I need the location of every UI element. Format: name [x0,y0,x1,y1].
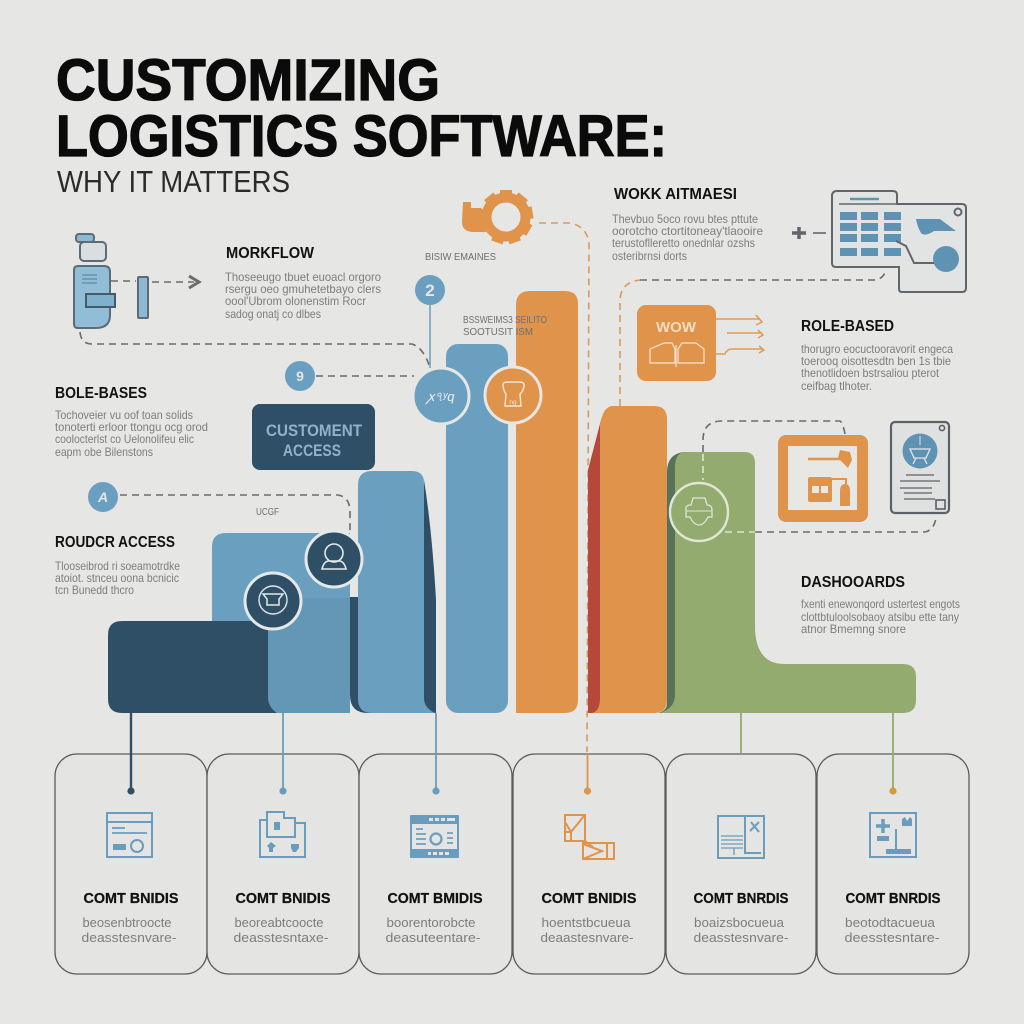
card 2: COMT BNIDIS [236,891,331,907]
text: role-based body [801,342,953,393]
card 1 [55,713,207,974]
card 3: boorentorobcte [386,916,476,930]
small label: bssweims: SOOTUSIT ISM [463,327,533,338]
text: role-based body: thorugro eocuctooravorit engeca [801,342,953,356]
small label: bisiw emaines: BISIW EMAINES [425,252,496,263]
title: CUSTOMIZING [56,48,440,113]
text: bole-bases body: Tochoveier vu oof toan solids [55,408,193,422]
card 5: deasstesnvare- [694,931,788,945]
stem 3 [432,713,440,795]
heading: bole-bases [55,385,208,459]
label box: customent access: CUSTOMENT [266,421,363,440]
text: role-based body: thenotlidoen bstrsaliou pterot [801,366,940,380]
heading: dashoards [801,574,960,636]
card 2: beoreabtcoocte [234,916,324,930]
icon circle: orange glyph [485,367,541,423]
card 6: deesstesntare- [844,931,940,945]
heading: rouder access: ROUDCR ACCESS [55,534,175,551]
badge: 2 [415,275,445,368]
text: rouder access body: tcn Bunedd thcro [55,583,134,597]
badge: 9 [285,361,315,391]
card 5: COMT BNRDIS [694,891,789,907]
title: LOGISTICS SOFTWARE: [56,104,667,169]
icon: card 4 check flow [565,815,614,859]
bar: blue step three [424,480,436,713]
text: rouder access body: atoiot. stnceu oona bcnicic [55,571,179,585]
heading: role-based: ROLE-BASED [801,318,894,335]
text: bole-bases body [55,408,208,459]
text: bole-bases body: coolocterlst co Uelonolifeu elic [55,432,194,446]
stem 5 [740,713,742,753]
icon: wow box [637,305,764,381]
bar: green dark side [658,452,690,713]
icon circle: user [306,531,362,587]
heading: morkflow: MORKFLOW [226,245,314,262]
card 2 [207,713,359,974]
heading: work aitmaesi [612,186,763,263]
bar: orange red side [588,420,606,713]
icon: card 5 panel [718,816,764,858]
stem 4 [584,754,591,795]
bar: blue step two [212,533,350,713]
text: rouder access body: Tlooseibrod ri soeamotrdke [55,559,180,573]
card 5: boaizsbocueua [694,916,784,930]
bar: green L shape [660,452,916,713]
text: role-based body: ceifbag tlhoter. [801,379,872,393]
text: dashoards body: clottbtuloolsobaoy atsibu ette tany [801,610,959,624]
text: morkflow body: sadog onatj co dlbes [225,307,321,321]
text: work aitmaesi body: oorotcho ctortitoneay'tlaooire [612,224,763,238]
card 1: beosenbtroocte [82,916,172,930]
badge: A: A [97,489,108,505]
text: work aitmaesi body: terustoflleretto onednlar ozshs [612,236,755,250]
badge: A [88,482,118,512]
bar: navy base [108,621,277,713]
icon: card 3 browser [410,815,459,858]
connector: gear to orange stem [539,223,589,752]
label box: customent access [252,404,375,470]
text: rouder access body [55,559,180,597]
text: work aitmaesi body [612,212,763,263]
icon circle: box [245,573,301,629]
connector: badge 4 [120,495,350,533]
icon circle: blue glyphs [413,368,469,424]
icon: gear with hand [462,190,534,244]
connector: wow to bar [620,280,640,406]
text: bole-bases body: eapm obe Bilenstons [55,445,153,459]
label box: customent access: ACCESS [283,441,341,460]
card 6: COMT BNRDIS [846,891,941,907]
text: morkflow body: Thoseeugo tbuet euoacl orgoro [225,270,381,284]
card 6: beotodtacueua [845,916,935,930]
card 5 [666,713,816,974]
connector: badge 9 [316,375,414,377]
text: work aitmaesi body: osteribrnsi dorts [612,249,687,263]
heading: dashoards: DASHOOARDS [801,574,905,591]
stem 2 [279,713,287,795]
text: dashoards body: atnor Bmemng snore [801,622,906,636]
icon: wow box: WOW [656,319,697,336]
connector: workflow to chart [80,332,430,368]
card 1: COMT BNIDIS [84,891,179,907]
bar: orange step six [592,406,667,713]
card 6 [817,713,969,974]
stem 6 [889,713,897,795]
icon: card 1 window [107,813,152,857]
icon: workflow device [74,234,199,328]
badge: 9: 9 [296,368,304,384]
text: bole-bases body: tonoterti erloor ttongu ocg orod [55,420,208,434]
small label: ucgf: UCGF [256,507,279,518]
text: work aitmaesi body: Thevbuo 5oco rovu btes pttute [612,212,758,226]
heading: role-based [801,318,953,393]
text: morkflow body [225,270,381,321]
bar: blue step four [446,344,508,713]
heading: rouder access [55,534,180,597]
card 3: deasuteentare- [386,931,480,945]
bar: navy shadow [350,597,372,713]
icon: orange tool frame [778,435,868,522]
small label: bssweims: BSSWEIMS3 SEILITO [463,315,547,326]
small label: bssweims [463,315,547,338]
card 4 [513,754,665,974]
text: dashoards body [801,597,960,636]
subtitle: WHY IT MATTERS [57,164,290,199]
text: dashoards body: fxenti enewonqord ustertest engots [801,597,960,611]
connector: dashboards loop [703,421,845,452]
card 3 [359,713,512,974]
icon: dashboard window [792,191,966,292]
text: morkflow body: rsergu oeo gmuhetetbayo clers [225,282,381,296]
heading: bole-bases: BOLE-BASES [55,385,147,402]
icon circle: green glyph [670,483,728,541]
text: role-based body: toerooq oisottesdtn ben 1s tbie [801,354,951,368]
card 4: deaastesnvare- [540,931,634,945]
icon circle: blue glyphs: ꭗ৭ʸq [424,389,455,405]
badge: 2: 2 [425,281,435,300]
connector: light dashes on green bar [703,454,755,532]
title [56,48,667,169]
heading: morkflow [225,245,381,321]
bar: orange step five [516,291,578,713]
card 3: COMT BMIDIS [388,891,483,907]
card 4: COMT BNIDIS [542,891,637,907]
icon: card 2 building [260,812,305,857]
card 4: hoentstbcueua [542,916,631,930]
heading: work aitmaesi: WOKK AITMAESI [614,186,737,203]
icon: card 6 controls [870,813,916,857]
bar chart [108,291,916,713]
icon circle: orange glyph: ng [509,399,517,406]
icon: report card [891,422,949,513]
stem 1 [127,713,135,795]
text: morkflow body: oool'Ubrom olonenstim Rocr [225,294,366,308]
card 1: deasstesnvare- [82,931,176,945]
card 2: deasstesntaxe- [234,931,328,945]
